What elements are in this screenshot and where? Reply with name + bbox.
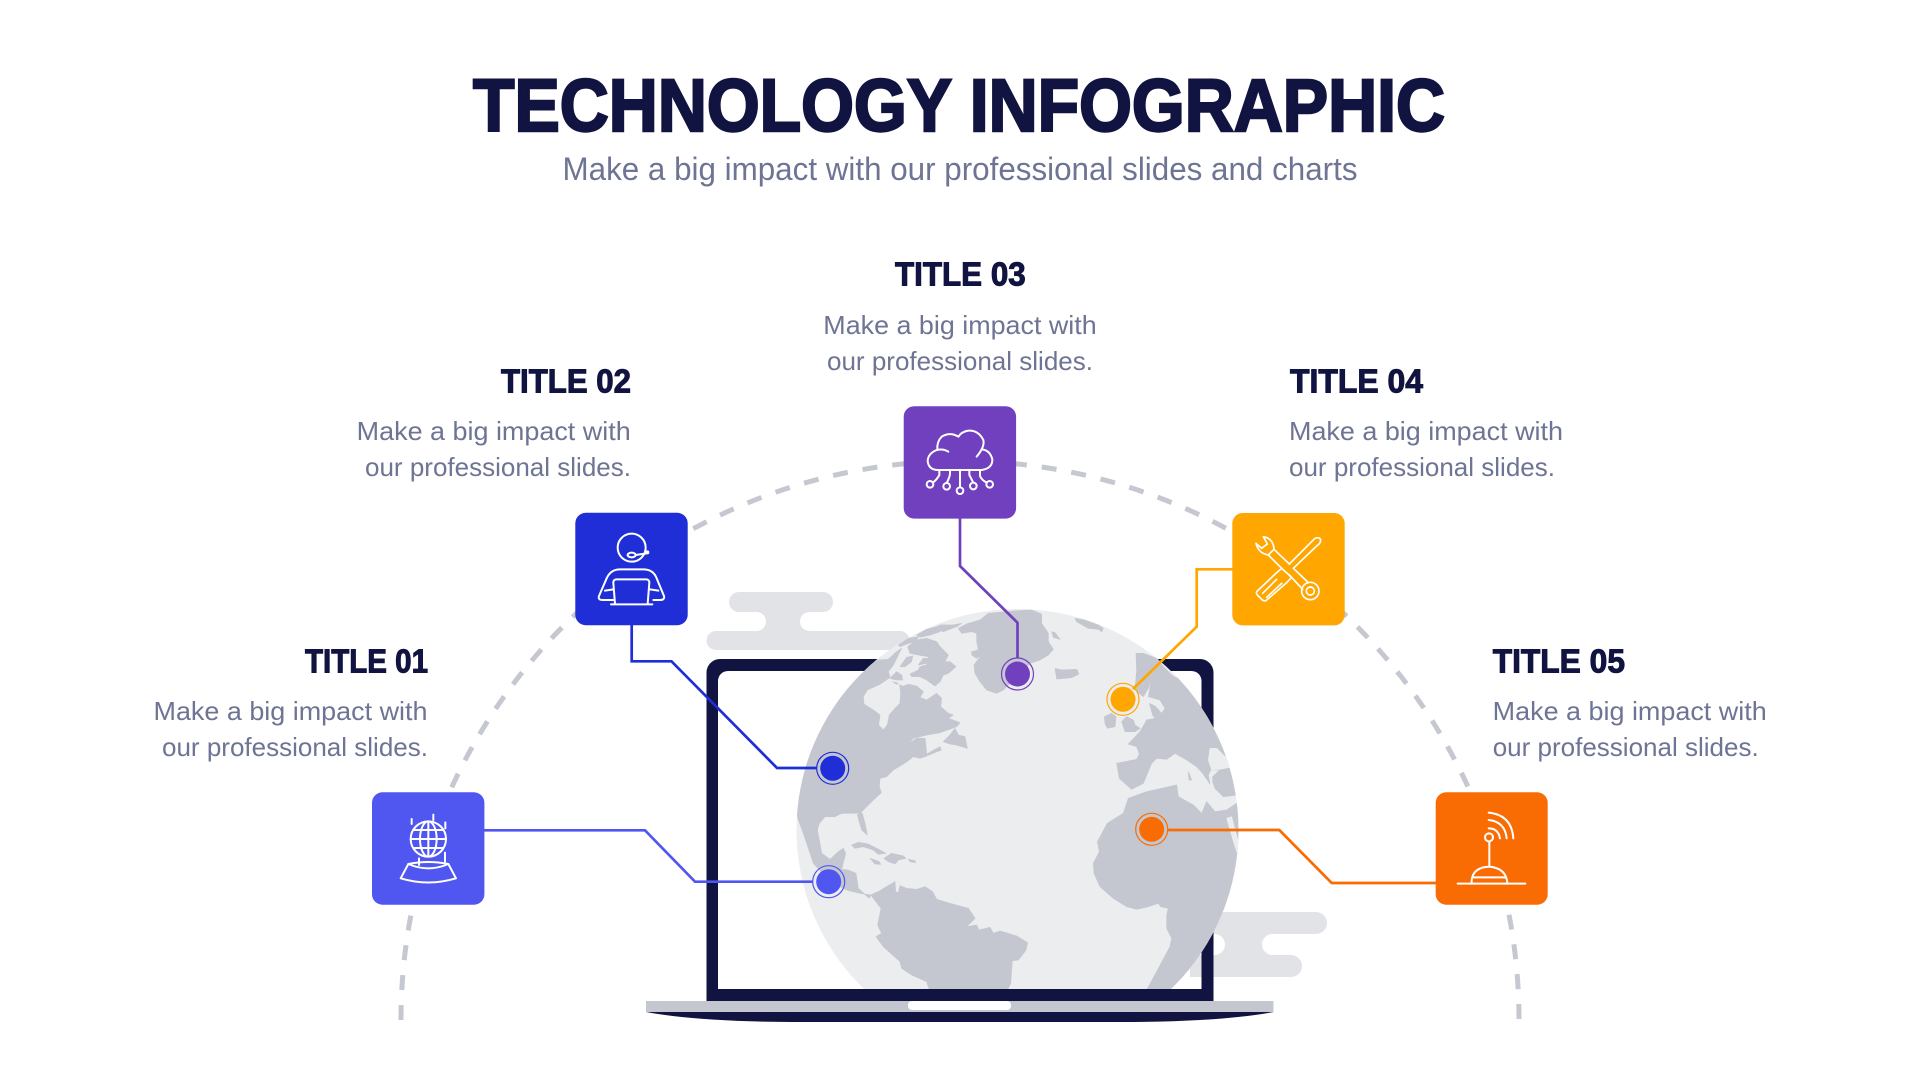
text block 01: TITLE 01 (305, 643, 428, 680)
dashed arc (401, 461, 1519, 1020)
text block 05: our professional slides. (1493, 732, 1759, 762)
globe (796, 609, 1238, 989)
text block 04: Make a big impact with (1289, 416, 1563, 446)
text block 02 (357, 363, 631, 482)
icon tile 03: cloud network (904, 406, 1016, 519)
icon tile 02: support agent (575, 513, 688, 625)
marker 03 (1002, 658, 1034, 690)
text block 01: Make a big impact with (154, 696, 428, 726)
icon tile 04: wrench and screwdriver (1232, 513, 1345, 625)
text block 03 (823, 256, 1097, 376)
connector 05 (1168, 830, 1436, 883)
text block 02: our professional slides. (365, 452, 631, 482)
cloud right (1190, 912, 1327, 977)
marker 01 (813, 866, 845, 898)
continents (797, 610, 1238, 989)
marker 02 (817, 752, 849, 784)
connector 03 (960, 518, 1018, 658)
text block 03: TITLE 03 (895, 256, 1026, 293)
marker 04 (1107, 683, 1139, 715)
text block 03: Make a big impact with (823, 310, 1097, 340)
text block 05: TITLE 05 (1493, 643, 1625, 680)
connector 01 (484, 830, 813, 882)
connector 02 (632, 625, 817, 768)
text block 02: Make a big impact with (357, 416, 631, 446)
text block 03: our professional slides. (827, 346, 1093, 376)
text block 01 (154, 643, 428, 762)
text block 04: TITLE 04 (1290, 363, 1424, 400)
laptop base (646, 1001, 1274, 1022)
icon tile 05: antenna joystick (1436, 792, 1548, 905)
cloud left (706, 592, 910, 650)
connector 04 (1133, 569, 1232, 689)
europe and africa (1051, 618, 1238, 989)
laptop bottom bezel (706, 989, 1214, 1001)
text block 02: TITLE 02 (501, 363, 631, 400)
text block 04 (1289, 363, 1563, 482)
title: TECHNOLOGY INFOGRAPHIC (473, 64, 1445, 147)
text block 05 (1493, 643, 1767, 762)
marker 05 (1136, 813, 1168, 845)
text block 04: our professional slides. (1289, 452, 1555, 482)
text block 01: our professional slides. (162, 732, 428, 762)
laptop screen frame (706, 659, 1214, 1001)
text block 05: Make a big impact with (1493, 696, 1767, 726)
subtitle: Make a big impact with our professional slides and charts (562, 151, 1358, 187)
icon tile 01: holographic globe (372, 792, 484, 905)
americas (780, 610, 1053, 992)
